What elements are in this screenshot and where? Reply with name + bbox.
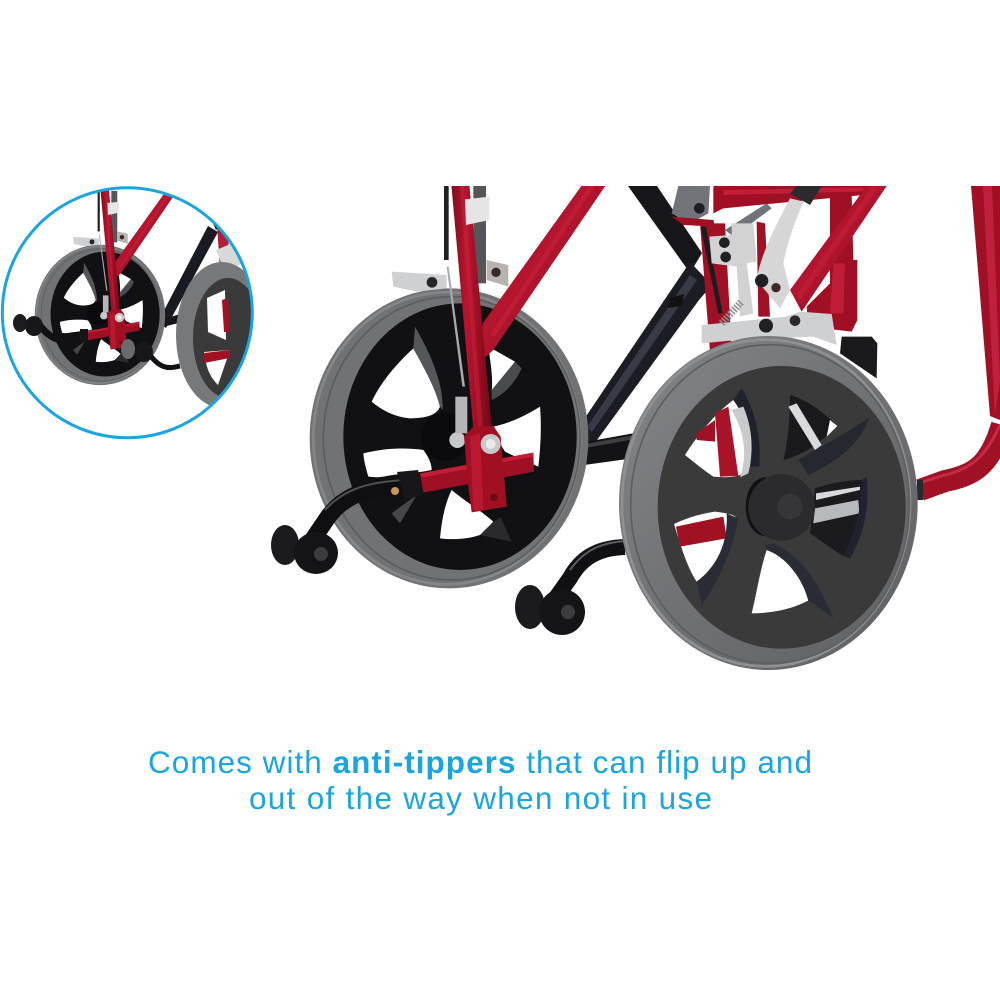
upper-right opening — [783, 395, 837, 460]
front wheel — [619, 336, 918, 670]
inset rear wheel — [35, 189, 178, 385]
inset blue ring — [2, 188, 252, 438]
inset circle: anti-tippers flipped up — [1, 183, 268, 439]
caption: out of the way when not in use — [249, 780, 712, 816]
inset flipped anti-tipper right — [121, 339, 180, 368]
front anti-tipper — [515, 541, 625, 635]
caption — [148, 744, 812, 816]
lower-left opening with red bar — [674, 512, 737, 582]
inset flipped anti-tipper left — [13, 314, 88, 342]
far right red tube — [917, 186, 1000, 500]
bottom opening — [752, 550, 808, 613]
hub plate — [658, 366, 906, 649]
hub cap — [746, 477, 766, 536]
inset frame rear tubes — [164, 224, 241, 328]
tire — [619, 336, 918, 670]
right side frame: red tubes, silver brake, black box — [672, 186, 887, 378]
upper-left opening with red tube — [685, 400, 751, 477]
inset front wheel — [176, 262, 251, 405]
main photo: wheelchair rear wheels with anti-tippers — [271, 169, 1000, 670]
right opening — [810, 480, 862, 556]
black cross-brace frame tubes — [586, 186, 706, 465]
rear anti-tipper — [271, 470, 424, 574]
caption: Comes with anti-tippers that can flip up and — [148, 744, 812, 780]
rear wheel and red frame — [310, 169, 617, 588]
